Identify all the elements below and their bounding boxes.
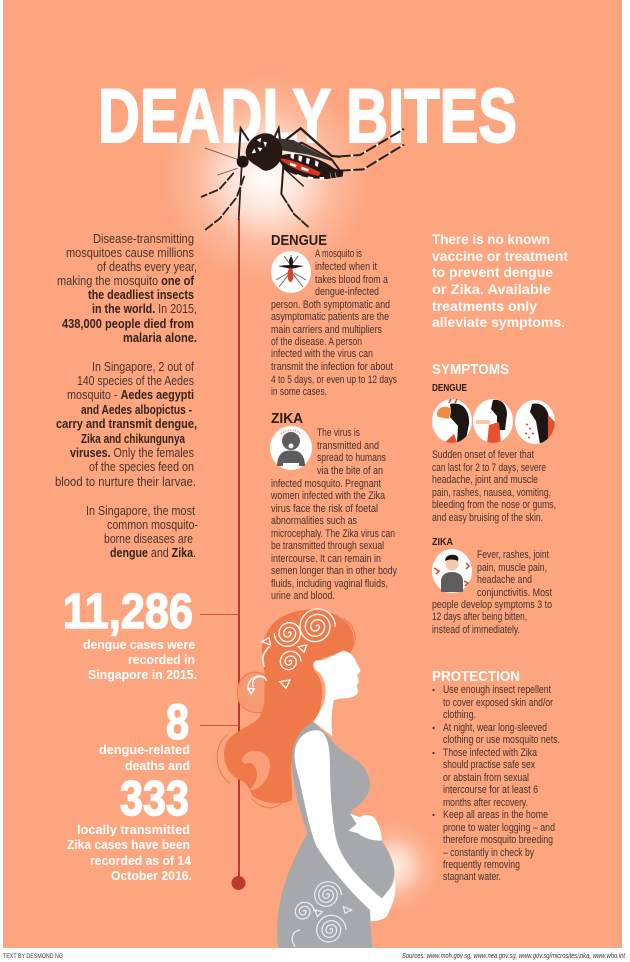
dengue description <box>271 248 397 398</box>
intro paragraph 1: the deadliest insects <box>88 288 194 302</box>
intro paragraph 3: common mosquito- <box>107 518 198 532</box>
protection bullet list: prone to water logging – and <box>443 822 555 834</box>
callout: no known vaccine: alleviate symptoms. <box>432 314 565 330</box>
dengue description: asymptomatic patients are the <box>271 311 389 323</box>
dengue description: infected with the virus can <box>271 348 373 360</box>
stat: 8 deaths and 333 Zika cases: deaths and <box>125 758 190 773</box>
protection bullet list: months after recovery. <box>443 797 528 809</box>
zika symptoms text: instead of immediately. <box>432 624 520 636</box>
intro text block <box>55 232 198 560</box>
zika description: women infected with the Zika <box>270 490 386 502</box>
intro paragraph 2: mosquito - Aedes aegypti <box>67 388 194 402</box>
footer credit: TEXT BY DESMOND NG <box>3 953 63 960</box>
intro paragraph 2: and Aedes albopictus - <box>81 403 192 417</box>
dengue symptoms text: headache, joint and muscle <box>432 474 538 486</box>
protection bullet list: clothing or use mosquito nets. <box>443 734 560 746</box>
intro paragraph 3: dengue and Zika. <box>110 546 196 560</box>
protection bullet list: clothing. <box>443 709 476 721</box>
zika description: intercourse. It can remain in <box>271 553 381 565</box>
zika description: virus face the risk of foetal <box>271 503 378 515</box>
zika symptoms text: pain, muscle pain, <box>477 562 547 574</box>
protection bullet list: Use enough insect repellent <box>443 684 551 696</box>
belly spirals <box>292 882 352 947</box>
protection bullet list: therefore mosquito breeding <box>443 834 553 846</box>
zika description: semen longer than in other body <box>271 565 397 577</box>
stat: 8 deaths and 333 Zika cases: recorded as of 14 <box>90 853 192 868</box>
intro paragraph 2: In Singapore, 2 out of <box>92 360 194 374</box>
intro paragraph 3 <box>86 504 198 560</box>
protection bullet list: frequently removing <box>443 859 520 871</box>
dengue description: 4 to 5 days, or even up to 12 days <box>271 374 397 386</box>
neck, face and arm <box>313 651 361 737</box>
heading: symptoms: SYMPTOMS <box>432 361 509 378</box>
zika description: The virus is <box>317 427 360 439</box>
zika description: microcephaly. The Zika virus can <box>271 528 395 540</box>
hair <box>224 609 354 803</box>
dengue description: infected when it <box>315 261 377 273</box>
heading: dengue: DENGUE <box>271 232 327 249</box>
icon: mosquito in circle <box>271 251 311 293</box>
hand <box>348 813 382 841</box>
callout: no known vaccine: or Zika. Available <box>432 281 551 297</box>
dengue description: of the disease. A person <box>271 336 362 348</box>
stat: 11,286 dengue cases: Singapore in 2015. <box>88 667 197 682</box>
protection bullet list: At night, wear long-sleeved <box>443 722 547 734</box>
stat: 8 deaths and 333 Zika cases: 333 <box>120 772 189 826</box>
upper curl <box>237 672 265 713</box>
dengue description: in some cases. <box>271 386 327 398</box>
dengue symptoms text: pain, rashes, nausea, vomiting, <box>432 487 551 499</box>
zika description <box>270 427 397 602</box>
protection bullet list: to cover exposed skin and/or <box>443 697 553 709</box>
intro paragraph 1: malaria alone. <box>123 331 197 345</box>
zika description: urine and blood. <box>271 590 335 602</box>
dengue description: dengue-infected <box>315 286 379 298</box>
icon: bleeding and rashes <box>515 400 556 444</box>
intro paragraph 2: blood to nurture their larvae. <box>55 475 196 489</box>
callout: no known vaccine: to prevent dengue <box>432 264 553 280</box>
glow behind belly <box>348 820 440 912</box>
heading: protection: PROTECTION <box>432 668 520 685</box>
zika symptoms text: people develop symptoms 3 to <box>432 599 552 611</box>
intro paragraph 1: Disease-transmitting <box>93 232 194 246</box>
intro paragraph 2: Zika and chikungunya <box>81 432 186 446</box>
stat: 8 deaths and 333 Zika cases: 8 <box>166 694 189 750</box>
zika description: fluids, including vaginal fluids, <box>271 578 388 590</box>
protection bullet list: intercourse for at least 6 <box>443 784 538 796</box>
dengue description: person. Both symptomatic and <box>271 299 390 311</box>
protection bullet list: Keep all areas in the home <box>443 809 548 821</box>
intro paragraph 3: In Singapore, the most <box>86 504 195 518</box>
protection bullet list: – constantly in check by <box>443 847 534 859</box>
illustration: pregnant woman <box>217 609 396 948</box>
dress <box>277 722 394 948</box>
intro paragraph 2 <box>55 360 197 489</box>
icon: headache <box>432 399 472 445</box>
callout: no known vaccine <box>432 231 568 330</box>
zika description: abnormalities such as <box>271 515 357 527</box>
subheading: zika symptoms: ZIKA <box>432 537 453 548</box>
stat: 8 deaths and 333 Zika cases: dengue-related <box>99 742 190 757</box>
dengue symptoms text: Sudden onset of fever that <box>432 449 534 461</box>
stat: 11,286 dengue cases: recorded in <box>128 652 195 667</box>
zika symptoms text <box>432 549 552 636</box>
protection bullet list: stagnant water. <box>443 871 501 883</box>
zika symptoms text: headache and <box>477 574 532 586</box>
stat: 11,286 dengue cases <box>63 585 197 682</box>
intro paragraph 2: of the species feed on <box>89 460 194 474</box>
hair lower curl <box>242 751 270 790</box>
dengue description: A mosquito is <box>315 248 362 260</box>
intro paragraph 2: 140 species of the Aedes <box>77 374 194 388</box>
icon: baby with microcephaly <box>270 426 312 470</box>
intro paragraph 2: viruses. Only the females <box>70 446 194 460</box>
dengue symptoms text: and easy bruising of the skin. <box>432 512 543 524</box>
zika description: transmitted and <box>317 440 379 452</box>
dengue symptoms text: bleeding from the nose or gums, <box>432 499 556 511</box>
intro paragraph 1: 438,000 people died from <box>62 317 194 331</box>
protection bullet list: should practise safe sex <box>443 759 535 771</box>
protection bullet list <box>432 684 560 883</box>
protection bullet list: Those infected with Zika <box>443 747 538 759</box>
icon: man with pain <box>432 549 472 593</box>
stat: 8 deaths and 333 Zika cases: Zika cases have been <box>67 837 190 852</box>
stat: 8 deaths and 333 Zika cases: locally transmitted <box>77 822 190 837</box>
timeline line <box>200 219 240 879</box>
dengue symptoms text <box>432 449 556 524</box>
callout: no known vaccine: treatments only <box>432 298 537 314</box>
intro paragraph 1: in the world. In 2015, <box>92 302 197 316</box>
zika description: via the bite of an <box>317 465 383 477</box>
dengue description: transmit the infection for about <box>271 361 393 373</box>
illustration: mosquito <box>202 128 403 230</box>
callout: no known vaccine: vaccine or treatment <box>432 248 568 264</box>
hair curl outlines <box>217 618 355 808</box>
protection bullet list: or abstain from sexual <box>443 772 529 784</box>
zika symptoms text: 12 days after being bitten, <box>432 611 527 623</box>
hair spirals <box>248 609 335 694</box>
icon: muscle pain <box>473 399 513 444</box>
subheading: dengue symptoms: DENGUE <box>432 383 467 394</box>
dengue description: main carriers and multipliers <box>271 324 382 336</box>
zika description: spread to humans <box>317 452 386 464</box>
stat: 8 deaths and 333 Zika cases <box>67 694 192 883</box>
timeline end dot <box>232 876 246 890</box>
dengue symptoms text: can last for 2 to 7 days, severe <box>432 462 546 474</box>
intro paragraph 3: borne diseases are <box>104 532 193 546</box>
stat: 8 deaths and 333 Zika cases: October 2016. <box>111 868 192 883</box>
dengue description: takes blood from a <box>315 274 389 286</box>
glow behind mosquito <box>161 73 371 283</box>
stat: 11,286 dengue cases: 11,286 <box>63 585 193 639</box>
zika description: infected mosquito. Pregnant <box>271 478 381 490</box>
heading: zika: ZIKA <box>271 410 303 427</box>
callout: no known vaccine: There is no known <box>432 231 550 247</box>
zika symptoms text: conjunctivitis. Most <box>477 587 552 599</box>
zika symptoms text: Fever, rashes, joint <box>477 549 549 561</box>
intro paragraph 1 <box>57 232 197 345</box>
intro paragraph 2: carry and transmit dengue, <box>56 417 197 431</box>
zika description: be transmitted through sexual <box>271 540 384 552</box>
intro paragraph 1: mosquitoes cause millions <box>66 246 194 260</box>
intro paragraph 1: of deaths every year, <box>97 260 197 274</box>
intro paragraph 1: making the mosquito one of <box>57 274 195 288</box>
stat: 11,286 dengue cases: dengue cases were <box>83 637 195 652</box>
